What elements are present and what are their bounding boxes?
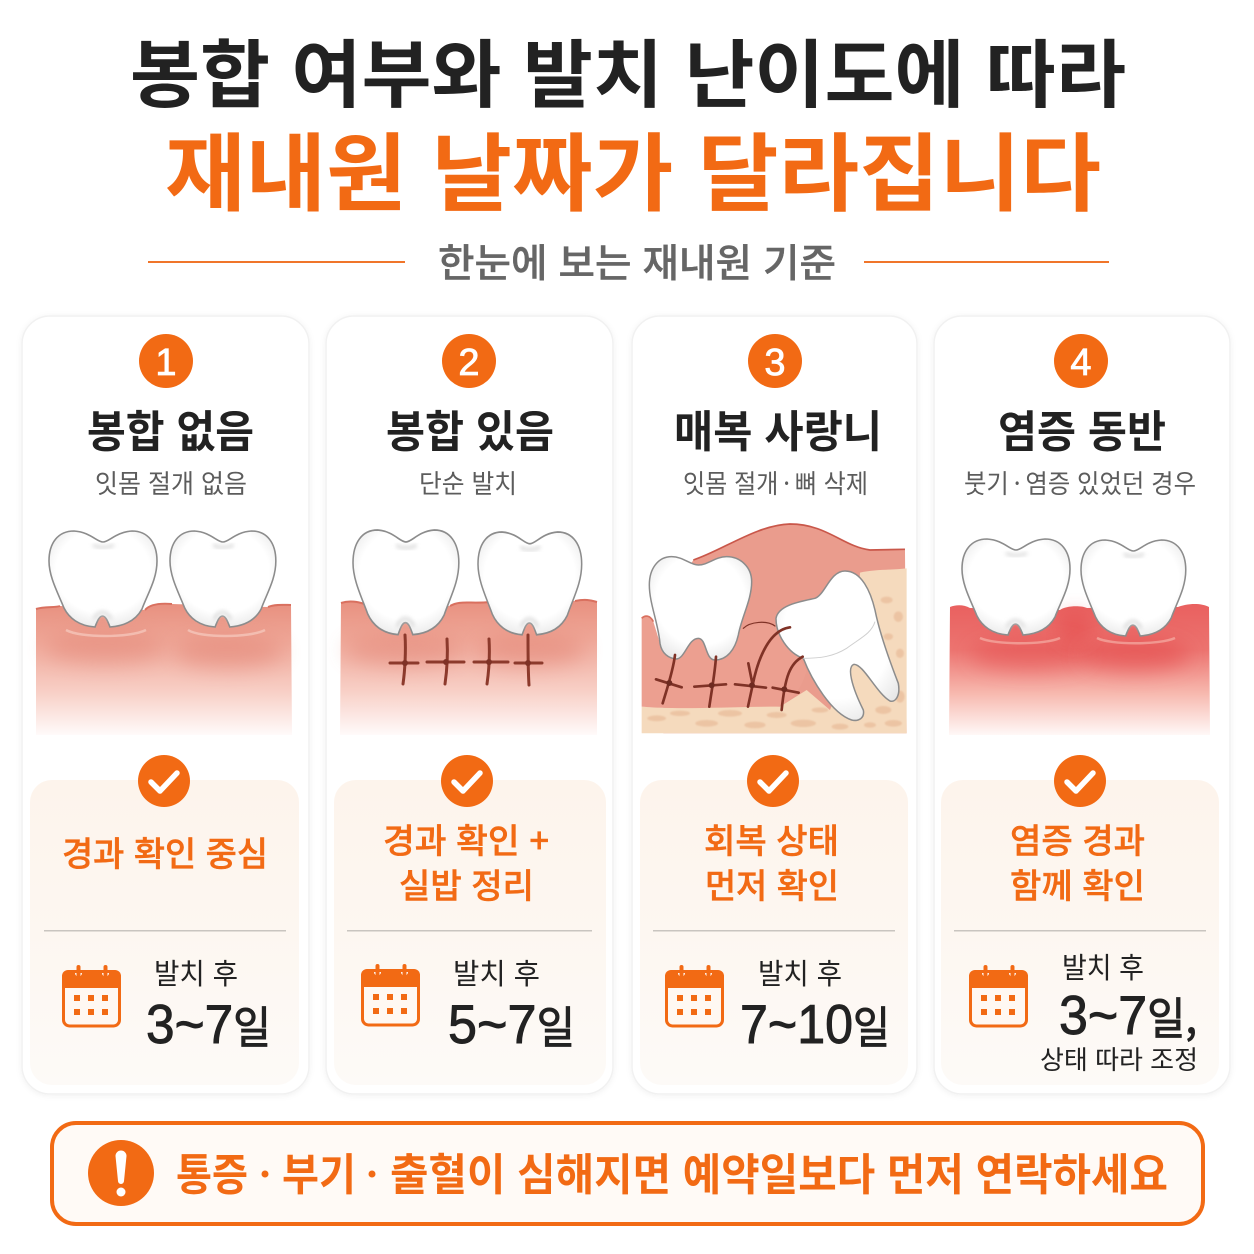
- result text 3: 먼저 확인: [705, 859, 839, 908]
- result panel 2: [334, 755, 606, 1085]
- result text 4: [1010, 814, 1145, 908]
- heading 1: 봉합 없음: [87, 396, 254, 460]
- description 1: 잇몸 절개 없음: [95, 464, 247, 501]
- result text 2: 경과 확인 +: [383, 814, 549, 863]
- result text 3: 회복 상태: [704, 814, 839, 863]
- warning text: 출혈이 심해지면 예약일보다 먼저 연락하세요: [390, 1139, 1168, 1203]
- callout: warning: [52, 1123, 1203, 1224]
- icon: warning: [88, 1140, 154, 1206]
- calendar icon 4: [969, 965, 1028, 1026]
- timing label 3: 발치 후: [758, 951, 842, 993]
- sutures: [656, 622, 803, 710]
- result text 4: 염증 경과: [1010, 814, 1145, 863]
- number badge 4: 4: [1070, 342, 1092, 384]
- number badge 2: 2: [458, 342, 480, 384]
- check icon 3: [747, 755, 799, 807]
- description 2: 단순 발치: [419, 464, 517, 501]
- result panel 3: [640, 755, 908, 1085]
- result panel 4: [941, 755, 1219, 1085]
- number badge 1: 1: [155, 342, 177, 384]
- panel: card 1: [22, 316, 309, 1094]
- heading 4: 염증 동반: [998, 396, 1166, 460]
- illustration: sutured gum: [340, 530, 597, 735]
- warning text: 부기: [282, 1139, 356, 1203]
- calendar icon 1: [62, 965, 121, 1026]
- result text 2: [383, 814, 549, 908]
- subtitle: 한눈에 보는 재내원 기준: [438, 233, 836, 289]
- panel: card 3: [632, 316, 917, 1094]
- result text 1: 경과 확인 중심: [62, 827, 268, 876]
- wisdom tooth: [776, 571, 899, 720]
- timing value 3: 7~10일: [740, 992, 890, 1056]
- description 4: 붓기 · 염증 있었던 경우: [964, 464, 1196, 501]
- check icon 2: [441, 755, 493, 807]
- timing value 2: 5~7일: [448, 992, 575, 1056]
- title: [130, 16, 1126, 229]
- illustration: impacted wisdom tooth: [642, 524, 907, 733]
- heading 3: 매복 사랑니: [674, 396, 882, 460]
- timing label 4: 발치 후: [1062, 945, 1144, 987]
- title: 재내원 날짜가 달라집니다: [165, 106, 1101, 229]
- timing value 4: 3~7일,: [1059, 983, 1197, 1047]
- timing note 4: 상태 따라 조정: [1040, 1040, 1198, 1077]
- calendar icon 3: [665, 965, 724, 1026]
- result panel 1: [30, 755, 299, 1085]
- number badge 4: [1054, 334, 1108, 388]
- number badge 1: [139, 334, 193, 388]
- title: 봉합 여부와 발치 난이도에 따라: [130, 16, 1126, 123]
- result text 3: [704, 814, 839, 908]
- check icon 1: [138, 755, 190, 807]
- warning text: 통증: [176, 1139, 248, 1203]
- timing value 1: 3~7일: [146, 992, 271, 1056]
- result text 4: 함께 확인: [1010, 859, 1145, 908]
- number badge 2: [442, 334, 496, 388]
- calendar icon 2: [361, 964, 420, 1025]
- sutures: [390, 635, 542, 685]
- result text 2: 실밥 정리: [399, 859, 534, 908]
- description 3: 잇몸 절개 · 뼈 삭제: [683, 464, 868, 501]
- illustration: healthy gum: [36, 531, 292, 735]
- timing label 1: 발치 후: [154, 951, 238, 993]
- check icon 4: [1054, 755, 1106, 807]
- heading 2: 봉합 있음: [386, 396, 554, 460]
- panel: card 2: [326, 316, 613, 1094]
- number badge 3: 3: [764, 342, 786, 384]
- panel: card 4: [934, 316, 1230, 1094]
- left molar: [649, 557, 752, 660]
- number badge 3: [748, 334, 802, 388]
- timing label 2: 발치 후: [453, 951, 540, 993]
- illustration: inflamed gum: [949, 539, 1210, 735]
